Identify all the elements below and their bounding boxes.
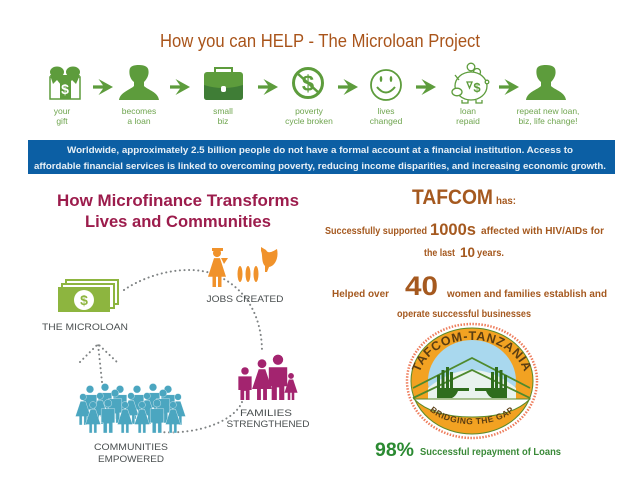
step label: becomes a loan: becomes: [122, 106, 156, 116]
title: How you can HELP - The Microloan Project: [160, 31, 480, 51]
icon: banknotes: [58, 280, 118, 312]
step label: poverty cycle broken: poverty: [295, 106, 324, 116]
label: the microloan: THE MICROLOAN: [42, 322, 128, 333]
logo: TAFCOM-Tanzania: TAFCOM-TANZANIA: [412, 331, 531, 372]
panel: TAFCOM achievements: [325, 186, 607, 461]
arrow: [258, 79, 278, 95]
arrow: [416, 79, 436, 95]
step label: your gift: your: [54, 106, 70, 116]
text: helped over 40: operate successful businesses: [397, 308, 531, 320]
stat: 98% repayment: [375, 440, 561, 461]
step label: repeat: repeat new loan,: [517, 106, 579, 116]
icon: piggy bank: $: [473, 80, 481, 95]
label: families strengthened: FAMILIES: [240, 408, 292, 419]
arrow: [499, 79, 519, 95]
heading: How Microfinance Transforms: [57, 192, 299, 210]
heading: TAFCOM has: TAFCOM: [412, 186, 493, 209]
step label: your gift: gift: [56, 116, 68, 126]
arrow: [93, 79, 113, 95]
dotted cycle path: [80, 270, 262, 432]
logo: TAFCOM-Tanzania: BRIDGING THE GAP: [430, 406, 512, 424]
step label: lives changed: lives: [377, 106, 395, 116]
icon: briefcase: [204, 68, 243, 100]
step label: small biz: small: [213, 106, 233, 116]
step label: loan repaid: repaid: [456, 116, 480, 126]
icon: smiley: [371, 70, 401, 100]
stat: 98% repayment: 98%: [375, 440, 414, 461]
label: communities empowered: EMPOWERED: [98, 454, 164, 465]
icon: person: [119, 65, 159, 100]
icon: poverty cycle broken: [294, 68, 322, 98]
stat: 98% repayment: Successful repayment of Loans: [420, 446, 561, 458]
step label: loan repaid: loan: [460, 106, 476, 116]
icon: piggy bank: [452, 63, 489, 103]
arrow: [170, 79, 190, 95]
heading: Lives and Communities: [85, 213, 271, 231]
icon: person repeat: [526, 65, 566, 100]
text: helped over 40: women and families establish and: [446, 288, 607, 300]
icon: poverty cycle broken: $: [302, 71, 314, 96]
statistic banner: Worldwide, approximately 2.5 billion people do not have a formal account at a financial institution. Access to: [67, 145, 573, 156]
label: jobs created: JOBS CREATED: [206, 294, 284, 305]
panel: how microfinance transforms: [42, 192, 310, 465]
icon: family: [238, 355, 298, 400]
text: supported 1000s: affected with HIV/AIDs for: [481, 225, 604, 237]
step label: becomes a loan: a loan: [127, 116, 151, 126]
icon: gift: $: [61, 81, 69, 97]
statistic banner: affordable financial services is linked to overcoming poverty, reducing income disparities, and increasing economic growth.: [34, 161, 606, 172]
icon: banknotes: $: [80, 292, 88, 308]
text: supported 1000s: the last: [424, 247, 455, 259]
label: communities empowered: COMMUNITIES: [94, 442, 168, 453]
text: helped over 40: 40: [405, 271, 438, 301]
process flow: [50, 63, 579, 126]
heading: TAFCOM has: has:: [496, 195, 516, 207]
icon: woman farmer, wheat and chicken: [208, 247, 278, 287]
text: helped over 40: [332, 271, 607, 320]
arrow: [338, 79, 358, 95]
text: helped over 40: Helped over: [332, 288, 389, 300]
logo: TAFCOM-Tanzania: [406, 322, 538, 440]
label: families strengthened: STRENGTHENED: [226, 419, 310, 430]
text: supported 1000s: Successfully supported: [325, 225, 427, 237]
text: supported 1000s: years.: [477, 247, 504, 259]
step label: lives changed: changed: [370, 116, 403, 126]
step label: poverty cycle broken: cycle broken: [285, 116, 333, 126]
step label: repeat: biz, life change!: [518, 116, 578, 126]
text: supported 1000s: 10: [460, 244, 475, 260]
text: supported 1000s: 1000s: [430, 220, 476, 239]
statistic banner: [28, 140, 615, 174]
icon: community crowd: [75, 383, 186, 433]
icon: gift: [50, 66, 80, 99]
step label: small biz: biz: [218, 116, 228, 126]
text: supported 1000s: [325, 220, 604, 260]
